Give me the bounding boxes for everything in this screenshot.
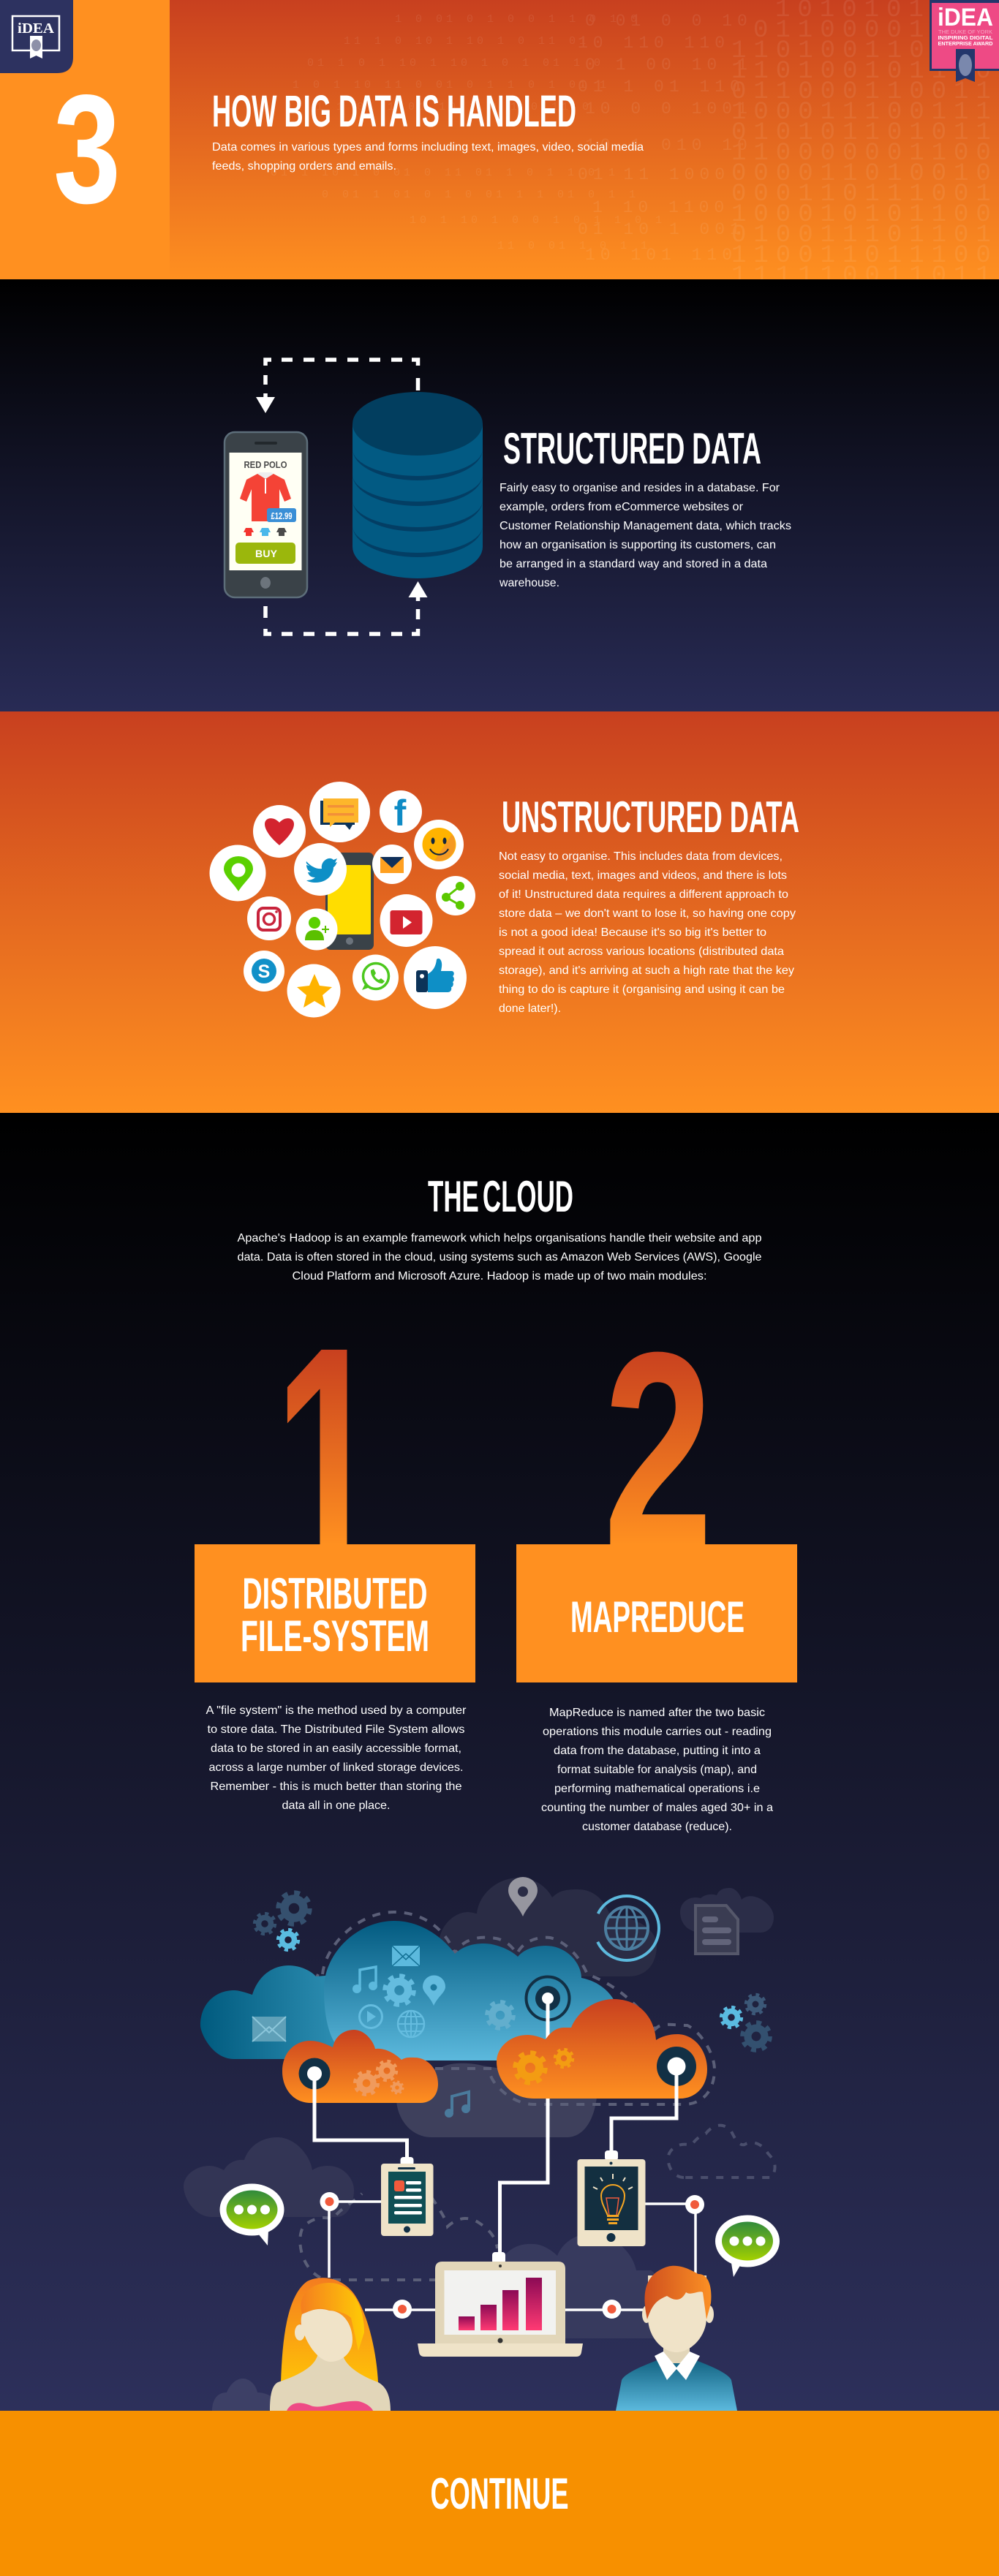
module 1 description: to store data. The Distributed File System allows xyxy=(208,1723,465,1736)
icon: envelope xyxy=(372,845,412,884)
phone device xyxy=(381,2157,433,2236)
box title: FILE-SYSTEM xyxy=(241,1612,429,1661)
binary digit background pattern: 100010101100 xyxy=(731,201,998,229)
unstructured data body text xyxy=(499,850,796,1015)
icon: envelope xyxy=(252,2017,286,2041)
icon: skype: S xyxy=(258,962,270,982)
module 1 description: data all in one place. xyxy=(282,1799,391,1812)
award badge: iDEA top right: iDEA xyxy=(938,4,993,31)
numeral 2: 2 xyxy=(603,1294,713,1605)
binary digit background pattern: 10 1 010 10 xyxy=(585,136,753,155)
binary digit background pattern: 110100101110 xyxy=(731,58,998,86)
icon: globe with arrows xyxy=(589,1891,664,1965)
icon: smartphone xyxy=(325,853,374,950)
cloud icons xyxy=(353,1946,513,2037)
dashed cloud outlines xyxy=(300,1912,715,2280)
structured data body text: be arranged in a standard way and stored in a data xyxy=(499,558,767,570)
award badge: iDEA top right: THE DUKE OF YORK xyxy=(938,29,992,35)
binary digit background pattern: 1 10 1100 xyxy=(592,198,744,217)
module 2 description: data from the database, putting it into a xyxy=(554,1745,761,1757)
icon: red polo shirt xyxy=(240,472,291,521)
module 1 description: data to be stored in an easily accessible format, xyxy=(211,1742,461,1755)
icon: music note xyxy=(445,2092,470,2118)
binary digit background pattern: 01 1 1 01 1 01 10 1 0 1 0 11 0 xyxy=(285,101,592,113)
binary digit background pattern: 10 110 110 xyxy=(578,34,730,53)
cables xyxy=(314,1998,676,2256)
icon: star xyxy=(287,964,341,1018)
unstructured data body text: store data – we don't want to lose it, so having one copy xyxy=(499,907,796,920)
icon: add user xyxy=(295,908,338,951)
phone label: red polo: RED POLO xyxy=(244,459,287,470)
binary digit background pattern: 11 1 0 10 1 10 1 0 11 01 xyxy=(344,35,589,48)
logo badge: iDEA top left: iDEA xyxy=(18,20,55,37)
price tag xyxy=(267,508,296,522)
binary digit background pattern: 010101101011 xyxy=(731,119,998,147)
cloud intro text: Cloud Platform and Microsoft Azure. Hadoop is made up of two main modules: xyxy=(293,1270,707,1283)
structured data body text xyxy=(499,482,791,589)
icon: facebook xyxy=(380,790,422,834)
orange number column xyxy=(0,0,170,279)
icon: location pin xyxy=(209,845,266,901)
box: mapreduce xyxy=(516,1544,797,1682)
module 2 description: operations this module carries out - reading xyxy=(543,1726,772,1738)
background clouds xyxy=(184,1878,774,2411)
module 2: mapreduce xyxy=(516,1294,797,1833)
binary digit background pattern: 01 1 0 1 10 1 10 1 0 1 01 1 0 xyxy=(307,57,604,69)
icon: location pin xyxy=(508,1877,538,1916)
icon: heart xyxy=(253,805,306,858)
box: distributed file-system xyxy=(195,1544,475,1682)
icon: message bubbles xyxy=(309,782,370,842)
illustration: cloud network xyxy=(184,1877,780,2411)
module 2 description: MapReduce is named after the two basic xyxy=(549,1707,765,1719)
box title: MAPREDUCE xyxy=(570,1593,744,1642)
icon: video play xyxy=(380,894,433,947)
icon: facebook: f xyxy=(394,793,407,834)
cloud intro text: data. Data is often stored in the cloud, using systems such as Amazon Web Services (AWS), Google xyxy=(237,1251,762,1264)
unstructured data body text: social media, text, images and videos, and there is lots xyxy=(499,869,787,882)
main blue cloud xyxy=(324,1921,616,2061)
binary digit background pattern: 01 1 01 110 xyxy=(578,78,745,97)
structured data body text: example, orders from eCommerce websites or xyxy=(499,501,744,513)
arrow: phone to database (dashed) xyxy=(265,581,427,634)
binary digit background pattern: 011000010 xyxy=(753,17,954,45)
binary digit background pattern: 100011100111 xyxy=(731,99,998,126)
binary digit background pattern: 110000001100 xyxy=(731,140,998,167)
left blue cloud xyxy=(200,1965,344,2059)
buy button xyxy=(235,543,295,564)
binary digit background pattern: 0 01 1 01 0 1 0 01 1 1 01 0 1 1 xyxy=(322,189,639,201)
speech bubble right xyxy=(715,2216,780,2277)
icon: light bulb xyxy=(593,2174,633,2224)
header intro text xyxy=(212,141,644,173)
heading: structured data: STRUCTURED DATA xyxy=(503,424,761,473)
binary digit background pattern: 0 01 0 0 10 xyxy=(585,12,753,31)
panel: unstructured data xyxy=(0,711,999,1113)
icon: twitter xyxy=(294,843,347,896)
connector lines xyxy=(329,2202,695,2310)
icon: whatsapp xyxy=(353,955,399,1000)
module 1: distributed file-system xyxy=(195,1277,475,1812)
binary digit background pattern: 01 10 1 001 xyxy=(578,220,745,239)
dashed cloud outline right xyxy=(668,2126,775,2177)
box title: DISTRIBUTED xyxy=(243,1569,427,1618)
binary digit background pattern: 10 101 110 xyxy=(585,246,737,265)
binary digit background pattern: 000011010010 xyxy=(731,160,998,188)
module 1 description: A "file system" is the method used by a computer xyxy=(206,1704,467,1717)
structured data body text: Fairly easy to organise and resides in a database. For xyxy=(499,482,780,494)
binary digit background pattern: 1 0 1 10 11 0 01 0 1 1 0 1 01 1 xyxy=(293,79,610,91)
continue label: CONTINUE xyxy=(430,2469,569,2518)
target hub on blue cloud xyxy=(527,1977,569,2020)
unstructured data body text: Not easy to organise. This includes data from devices, xyxy=(499,850,783,863)
binary digit background pattern: 110011011100 xyxy=(731,242,998,270)
binary digit background pattern: 111110011011 xyxy=(731,262,998,290)
module 2 description: performing mathematical operations i.e xyxy=(554,1783,760,1795)
large orange cloud xyxy=(497,1999,707,2099)
unstructured data body text: storage), and it's arriving at such a high rate that the key xyxy=(499,964,794,977)
heading: how big data is handled: HOW BIG DATA IS HANDLED xyxy=(212,86,576,136)
phone product screen xyxy=(225,432,307,597)
woman figure xyxy=(270,2278,391,2411)
binary digit background pattern: 01 1 10 1 0 01 0 11 01 1 0 1 1 0 1 xyxy=(271,167,619,179)
speech bubble left xyxy=(219,2183,284,2245)
database cylinder xyxy=(353,392,483,578)
icon: share xyxy=(436,876,475,915)
structured data body text: warehouse. xyxy=(499,577,559,589)
bar chart xyxy=(459,2278,542,2330)
header intro text: Data comes in various types and forms including text, images, video, social media xyxy=(212,141,644,154)
box title xyxy=(241,1569,429,1661)
module 1 description xyxy=(206,1704,467,1812)
module 2 description: format suitable for analysis (map), and xyxy=(557,1764,757,1776)
award badge: iDEA top right: ENTERPRISE AWARD xyxy=(938,40,993,47)
unstructured data body text: spread it out across various locations (distributed data xyxy=(499,945,784,958)
cloud intro text xyxy=(237,1232,762,1283)
icon: instagram xyxy=(247,896,291,940)
binary digit background pattern: 110100110111 xyxy=(731,37,998,65)
structured data body text: how an organisation is supporting its customers, can xyxy=(499,539,776,551)
gears right xyxy=(721,1995,770,2050)
module 1 description: across a large number of linked storage devices. xyxy=(209,1761,464,1774)
numeral 1: 1 xyxy=(274,1277,383,1652)
icon: smiley xyxy=(414,820,464,869)
module 2 description: customer database (reduce). xyxy=(582,1821,732,1833)
colour option shirts xyxy=(244,528,287,536)
laptop with bar chart xyxy=(418,2252,583,2357)
structured data body text: Customer Relationship Management data, which tracks xyxy=(499,520,791,532)
panel: header band xyxy=(0,0,999,290)
unstructured data body text: thing to do is capture it (organising and using it can be xyxy=(499,983,785,996)
price tag: £12.99 xyxy=(271,510,293,521)
binary digit background pattern: 010011101101 xyxy=(731,222,998,249)
module 2 description: counting the number of males aged 30+ in a xyxy=(541,1802,773,1814)
icon: skype xyxy=(244,951,284,992)
header intro text: feeds, shopping orders and emails. xyxy=(212,160,396,173)
small orange cloud xyxy=(282,2030,438,2103)
binary digit background pattern: 10 0 0 1001 xyxy=(585,99,753,118)
man figure xyxy=(616,2266,737,2411)
binary digit background pattern xyxy=(271,0,998,290)
binary digit background pattern: 000110111001 xyxy=(731,181,998,208)
unstructured data body text: of it! Unstructured data requires a different approach to xyxy=(499,888,788,901)
binary digit background pattern: 011000110011 xyxy=(731,78,998,106)
tablet device xyxy=(578,2150,645,2246)
social media cluster xyxy=(209,782,475,1018)
award badge: iDEA top right: INSPIRING DIGITAL xyxy=(938,34,993,41)
icon: document xyxy=(695,1905,738,1954)
panel: the cloud xyxy=(0,1113,999,2411)
logo badge: iDEA top left xyxy=(0,0,73,73)
unstructured data body text: is not a good idea! Because it's so big it's better to xyxy=(499,926,766,939)
heading: unstructured data: UNSTRUCTURED DATA xyxy=(502,793,799,842)
binary digit background pattern: 1 0 01 0 1 0 0 1 1 0 1 0 xyxy=(395,13,641,26)
section number 3: 3 xyxy=(53,62,121,235)
binary digit background pattern: 11 0 01 1 0 1 1 xyxy=(497,240,651,252)
award badge: iDEA top right xyxy=(930,0,999,82)
module 2 description xyxy=(541,1707,773,1833)
binary digit background pattern: 01 11 1000 xyxy=(578,165,730,184)
connector nodes xyxy=(320,2192,704,2319)
panel: structured data xyxy=(0,279,999,711)
arrow: database to phone (dashed) xyxy=(256,360,418,413)
module 1 description: Remember - this is much better than storing the xyxy=(211,1780,462,1793)
buy button: BUY xyxy=(255,548,278,559)
binary digit background pattern: 0 1 00 10 1 xyxy=(585,56,753,75)
heading: the cloud: THE CLOUD xyxy=(428,1172,573,1221)
cloud intro text: Apache's Hadoop is an example framework which helps organisations handle their website and app xyxy=(237,1232,762,1244)
panel: continue button xyxy=(0,2411,999,2576)
binary digit background pattern: 10 1 10 1 0 0 1 0 1 1 0 1 xyxy=(410,214,666,227)
icon: thumbs up xyxy=(404,946,467,1009)
unstructured data body text: done later!). xyxy=(499,1002,561,1015)
gears top left xyxy=(255,1893,309,1950)
